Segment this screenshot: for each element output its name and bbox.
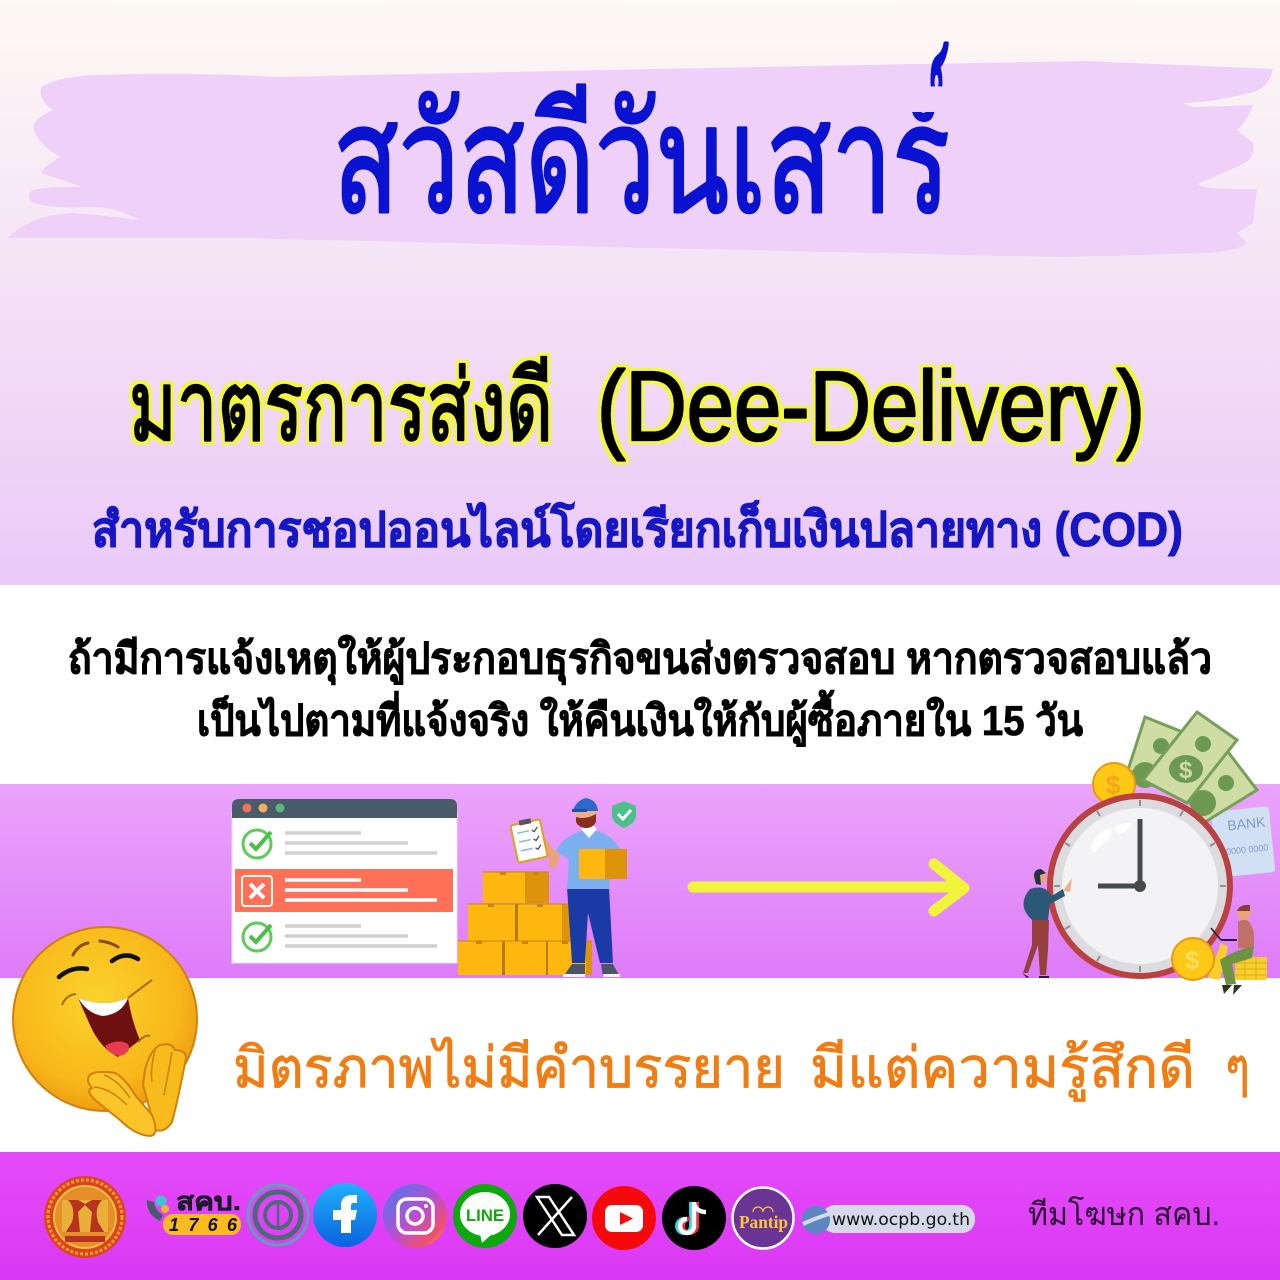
illustration: man pointing at clock xyxy=(1022,869,1072,978)
title: greeting: ร์ xyxy=(921,38,950,273)
illustration: delivery man xyxy=(540,798,627,977)
white statement panel xyxy=(0,585,1280,784)
website pill xyxy=(802,1205,975,1234)
icon: LINE xyxy=(453,1184,517,1248)
title: greeting xyxy=(338,42,949,214)
icon: instagram xyxy=(383,1184,447,1248)
icon: facebook xyxy=(313,1183,377,1247)
heading: Dee-Delivery: มาตรการส่งดี xyxy=(129,351,553,461)
white caption panel xyxy=(0,978,1280,1152)
icon: shield check xyxy=(612,801,636,828)
caption: friendship text: มิตรภาพไม่มีคำบรรยาย xyxy=(233,1036,785,1099)
illustration: seated man with laptop xyxy=(1211,905,1254,995)
statement text: ถ้ามีการแจ้งเหตุให้ผู้ประกอบธุรกิจขนส่งตรวจสอบ หากตรวจสอบแล้ว xyxy=(68,634,1212,685)
illustration: checklist window xyxy=(232,799,457,963)
icon: bottom coin: $ xyxy=(1185,945,1200,975)
caption: friendship text: ๆ xyxy=(1225,1036,1250,1099)
footer band xyxy=(0,1152,1280,1280)
team signature: ทีมโฆษก สคบ. xyxy=(1028,1196,1220,1232)
statement text xyxy=(68,634,1212,747)
icon: laughing emoji xyxy=(13,927,197,1136)
icon: top coin: $ xyxy=(1106,770,1121,800)
icon: X xyxy=(523,1184,587,1248)
heading: Dee-Delivery: (Dee-Delivery) xyxy=(597,351,1145,461)
heading: Dee-Delivery xyxy=(129,351,1145,461)
icon: Pantip xyxy=(732,1188,794,1248)
icon: TikTok xyxy=(662,1186,726,1250)
arrow xyxy=(693,864,964,911)
icon: OCPB seal xyxy=(44,1176,126,1258)
icon: hotline 1766: 1766 xyxy=(169,1215,238,1235)
icon: bottom coin xyxy=(1172,938,1214,980)
title: greeting: สวัสดีวันเสาร์ xyxy=(333,76,950,244)
purple illustration band xyxy=(0,784,1280,978)
top gradient panel xyxy=(0,0,1280,585)
illustration: bank card: BANK xyxy=(1226,814,1267,834)
illustration: clock xyxy=(1047,793,1233,979)
illustration: stacked parcels xyxy=(458,872,592,975)
statement text: เป็นไปตามที่แจ้งจริง ให้คืนเงินให้กับผู้ซื้อภายใน 15 วัน xyxy=(197,689,1083,747)
illustration: banknotes: $ xyxy=(1179,757,1193,784)
caption: friendship text xyxy=(233,1036,1250,1102)
icon: hotline 1766 xyxy=(147,1188,241,1235)
illustration: banknotes xyxy=(1128,712,1257,822)
icon: clipboard xyxy=(510,816,548,863)
brush stroke behind greeting xyxy=(8,61,1273,257)
icon: LINE: LINE xyxy=(466,1206,504,1225)
icon: Pantip: Pantip xyxy=(739,1212,788,1232)
illustration: gold stacks xyxy=(1208,943,1267,980)
subheading: COD: สำหรับการชอปออนไลน์โดยเรียกเก็บเงินปลายทาง (COD) xyxy=(92,500,1183,557)
illustration: bank card xyxy=(1211,806,1275,878)
icon: top coin xyxy=(1093,763,1135,805)
icon: hotline 1766: สคบ. xyxy=(176,1188,241,1216)
caption: friendship text: มีแต่ความรู้สึกดี xyxy=(810,1036,1195,1102)
website pill: www.ocpb.go.th xyxy=(832,1210,970,1230)
icon: PE ring logo xyxy=(248,1185,308,1245)
icon: YouTube xyxy=(592,1186,656,1250)
illustration: bank card: 0000 0000 xyxy=(1226,842,1269,857)
